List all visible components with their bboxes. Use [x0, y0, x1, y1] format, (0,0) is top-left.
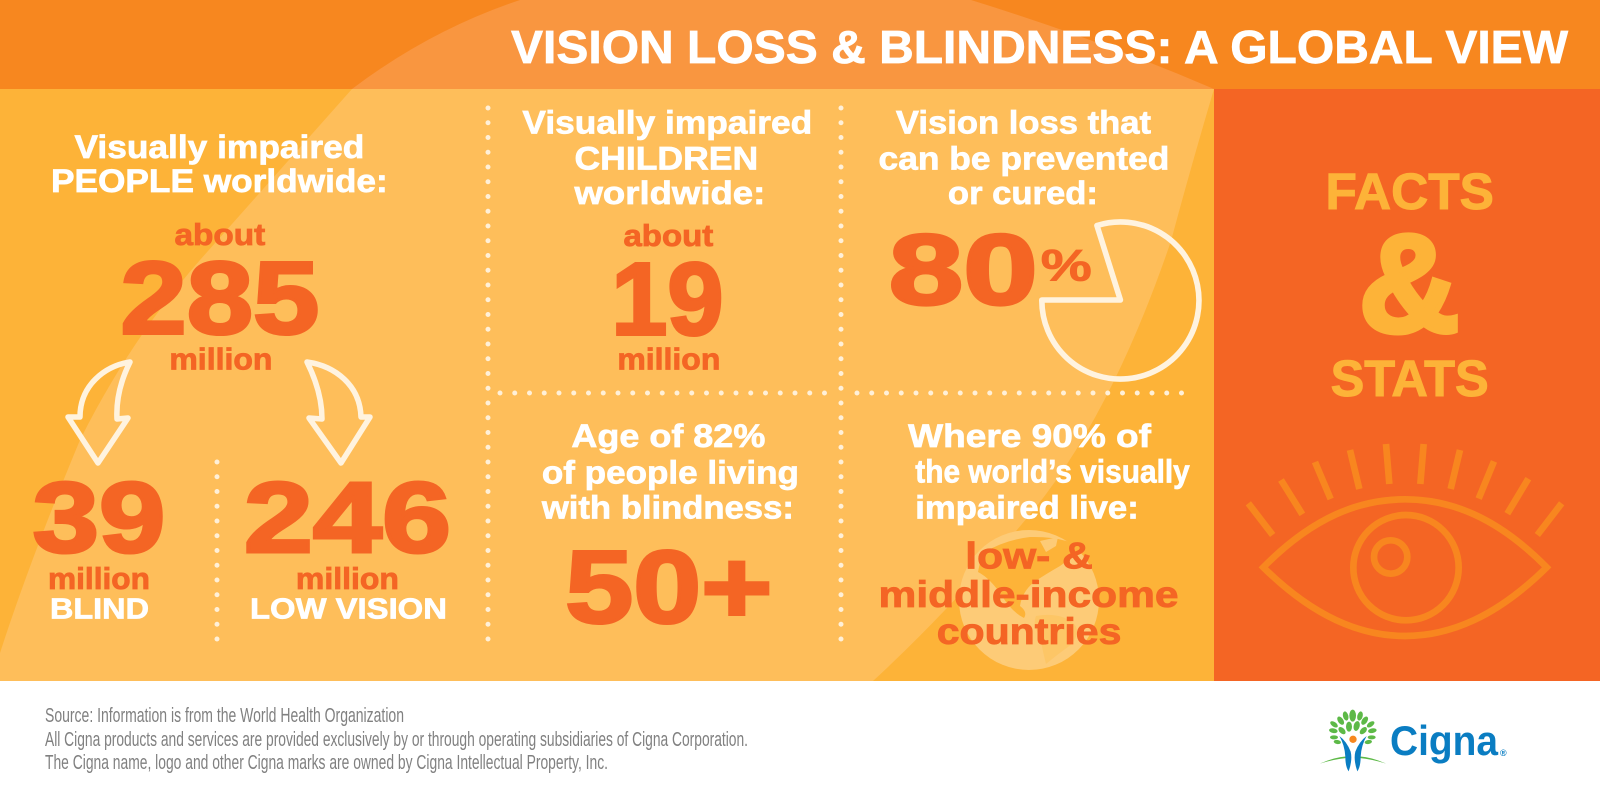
stat: 39 million blind: million — [48, 562, 150, 596]
heading: where 90 percent live: Where 90% of — [908, 417, 1151, 454]
icon: tree of life — [1320, 710, 1386, 771]
heading: age of 82 percent: of people living — [542, 454, 799, 491]
stat: 246 million low vision — [244, 462, 451, 625]
panel: age of blindness — [541, 417, 799, 644]
side panel heading: facts and stats — [1325, 163, 1494, 407]
stat: 19 million: about — [623, 219, 713, 253]
header band — [0, 0, 1600, 89]
footer source text: All Cigna products and services are provided exclusively by or through operating subsidiaries of Cigna Corporation. — [45, 729, 748, 751]
panel: visually impaired people — [33, 128, 451, 625]
heading: children worldwide — [522, 104, 812, 211]
heading: people worldwide — [51, 128, 388, 199]
side panel background — [1214, 89, 1600, 681]
side panel heading: facts and stats: FACTS — [1325, 163, 1494, 220]
icon: left arrow — [68, 362, 130, 463]
heading: where 90 percent live — [908, 417, 1190, 525]
heading: children worldwide: Visually impaired — [522, 104, 812, 141]
footer source text — [45, 705, 748, 774]
heading: prevented or cured — [879, 104, 1169, 211]
panel: visually impaired children — [522, 104, 812, 376]
stat: 246 million low vision: 246 — [244, 462, 451, 574]
heading: age of 82 percent — [541, 417, 799, 525]
stat: 285 million: million — [169, 342, 272, 376]
icon: eye — [1248, 444, 1562, 636]
stat: 285 million — [120, 218, 319, 376]
stat: low and middle income countries: middle-income — [879, 574, 1179, 615]
stat: 246 million low vision: million — [296, 562, 399, 596]
stat: 39 million blind: 39 — [33, 462, 165, 574]
icon: pie chart — [1042, 222, 1199, 379]
stat: 80 percent — [889, 214, 1092, 326]
stat: 285 million: 285 — [120, 241, 319, 356]
stat: low and middle income countries — [879, 535, 1179, 652]
side panel heading: facts and stats: & — [1359, 205, 1460, 362]
panel: where visually impaired live — [879, 417, 1190, 652]
heading: where 90 percent live: impaired live: — [915, 488, 1139, 525]
heading: children worldwide: worldwide: — [573, 174, 765, 211]
panel: preventable vision loss — [879, 104, 1199, 379]
heading: age of 82 percent: with blindness: — [541, 488, 794, 525]
heading: age of 82 percent: Age of 82% — [571, 417, 765, 454]
stat: 80 percent: 80 — [889, 214, 1038, 326]
dotted dividers — [217, 108, 1196, 640]
wordmark: Cigna — [1390, 717, 1499, 764]
footer source text: Source: Information is from the World Health Organization — [45, 705, 404, 727]
stat: 39 million blind: BLIND — [50, 593, 149, 625]
stat: 39 million blind — [33, 462, 165, 625]
heading: prevented or cured: can be prevented — [879, 139, 1169, 176]
stat panels — [33, 104, 1494, 652]
stat: 19 million: 19 — [611, 242, 723, 357]
icon: right arrow — [307, 362, 370, 463]
stat: 19 million: million — [617, 342, 720, 376]
heading: children worldwide: CHILDREN — [574, 139, 758, 176]
stat: low and middle income countries: countries — [937, 611, 1121, 652]
heading: people worldwide: PEOPLE worldwide: — [51, 162, 388, 199]
stat: 50+: 50+ — [565, 529, 772, 644]
heading: people worldwide: Visually impaired — [74, 128, 364, 165]
title: VISION LOSS & BLINDNESS: A GLOBAL VIEW — [511, 21, 1569, 73]
stat: 80 percent: % — [1041, 240, 1092, 291]
icon: globe — [959, 530, 1099, 670]
registered mark: ® — [1500, 748, 1507, 758]
logo: Cigna — [1320, 710, 1507, 771]
heading: where 90 percent live: the world’s visually — [915, 453, 1190, 490]
main panel background — [0, 89, 1214, 681]
stat: 285 million: about — [174, 218, 265, 252]
side panel heading: facts and stats: STATS — [1331, 350, 1489, 407]
footer source text: The Cigna name, logo and other Cigna marks are owned by Cigna Intellectual Property, Inc. — [45, 752, 608, 774]
stat: 246 million low vision: LOW VISION — [250, 593, 447, 625]
heading: prevented or cured: Vision loss that — [896, 104, 1151, 141]
heading: prevented or cured: or cured: — [948, 174, 1098, 211]
stat: low and middle income countries: low- & — [965, 535, 1093, 576]
